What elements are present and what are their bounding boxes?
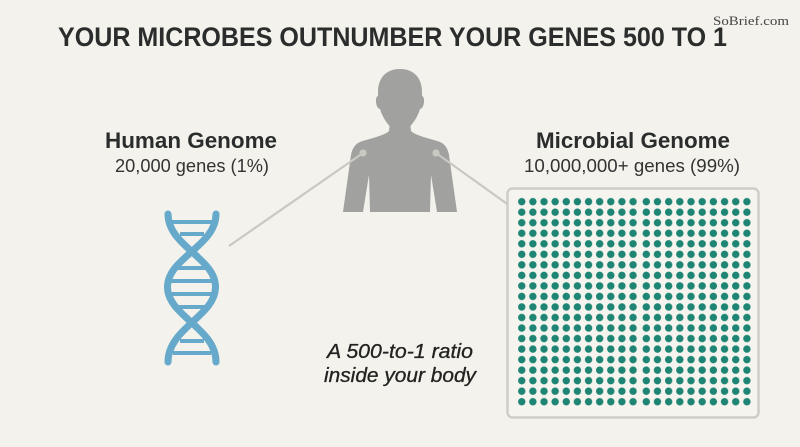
heading: human genome: Human Genome (105, 128, 277, 153)
heading: human genome (105, 128, 277, 176)
heading: microbial genome: 10,000,000+ genes (99%) (524, 155, 740, 176)
connector: microbial genome line (432, 149, 510, 206)
connector: human genome line (229, 149, 367, 246)
watermark: SoBrief.com (713, 14, 789, 28)
heading: microbial genome (524, 128, 740, 176)
heading: human genome: 20,000 genes (1%) (115, 155, 269, 176)
icon: DNA helix (168, 214, 216, 362)
icon: human silhouette (343, 69, 457, 212)
callout: ratio (324, 341, 477, 387)
callout: ratio: inside your body (324, 365, 477, 387)
callout: ratio: A 500-to-1 ratio (326, 341, 473, 363)
heading: microbial genome: Microbial Genome (536, 128, 730, 153)
title: YOUR MICROBES OUTNUMBER YOUR GENES 500 TO 1 (58, 22, 727, 52)
panel: gene dot grid (508, 188, 758, 418)
